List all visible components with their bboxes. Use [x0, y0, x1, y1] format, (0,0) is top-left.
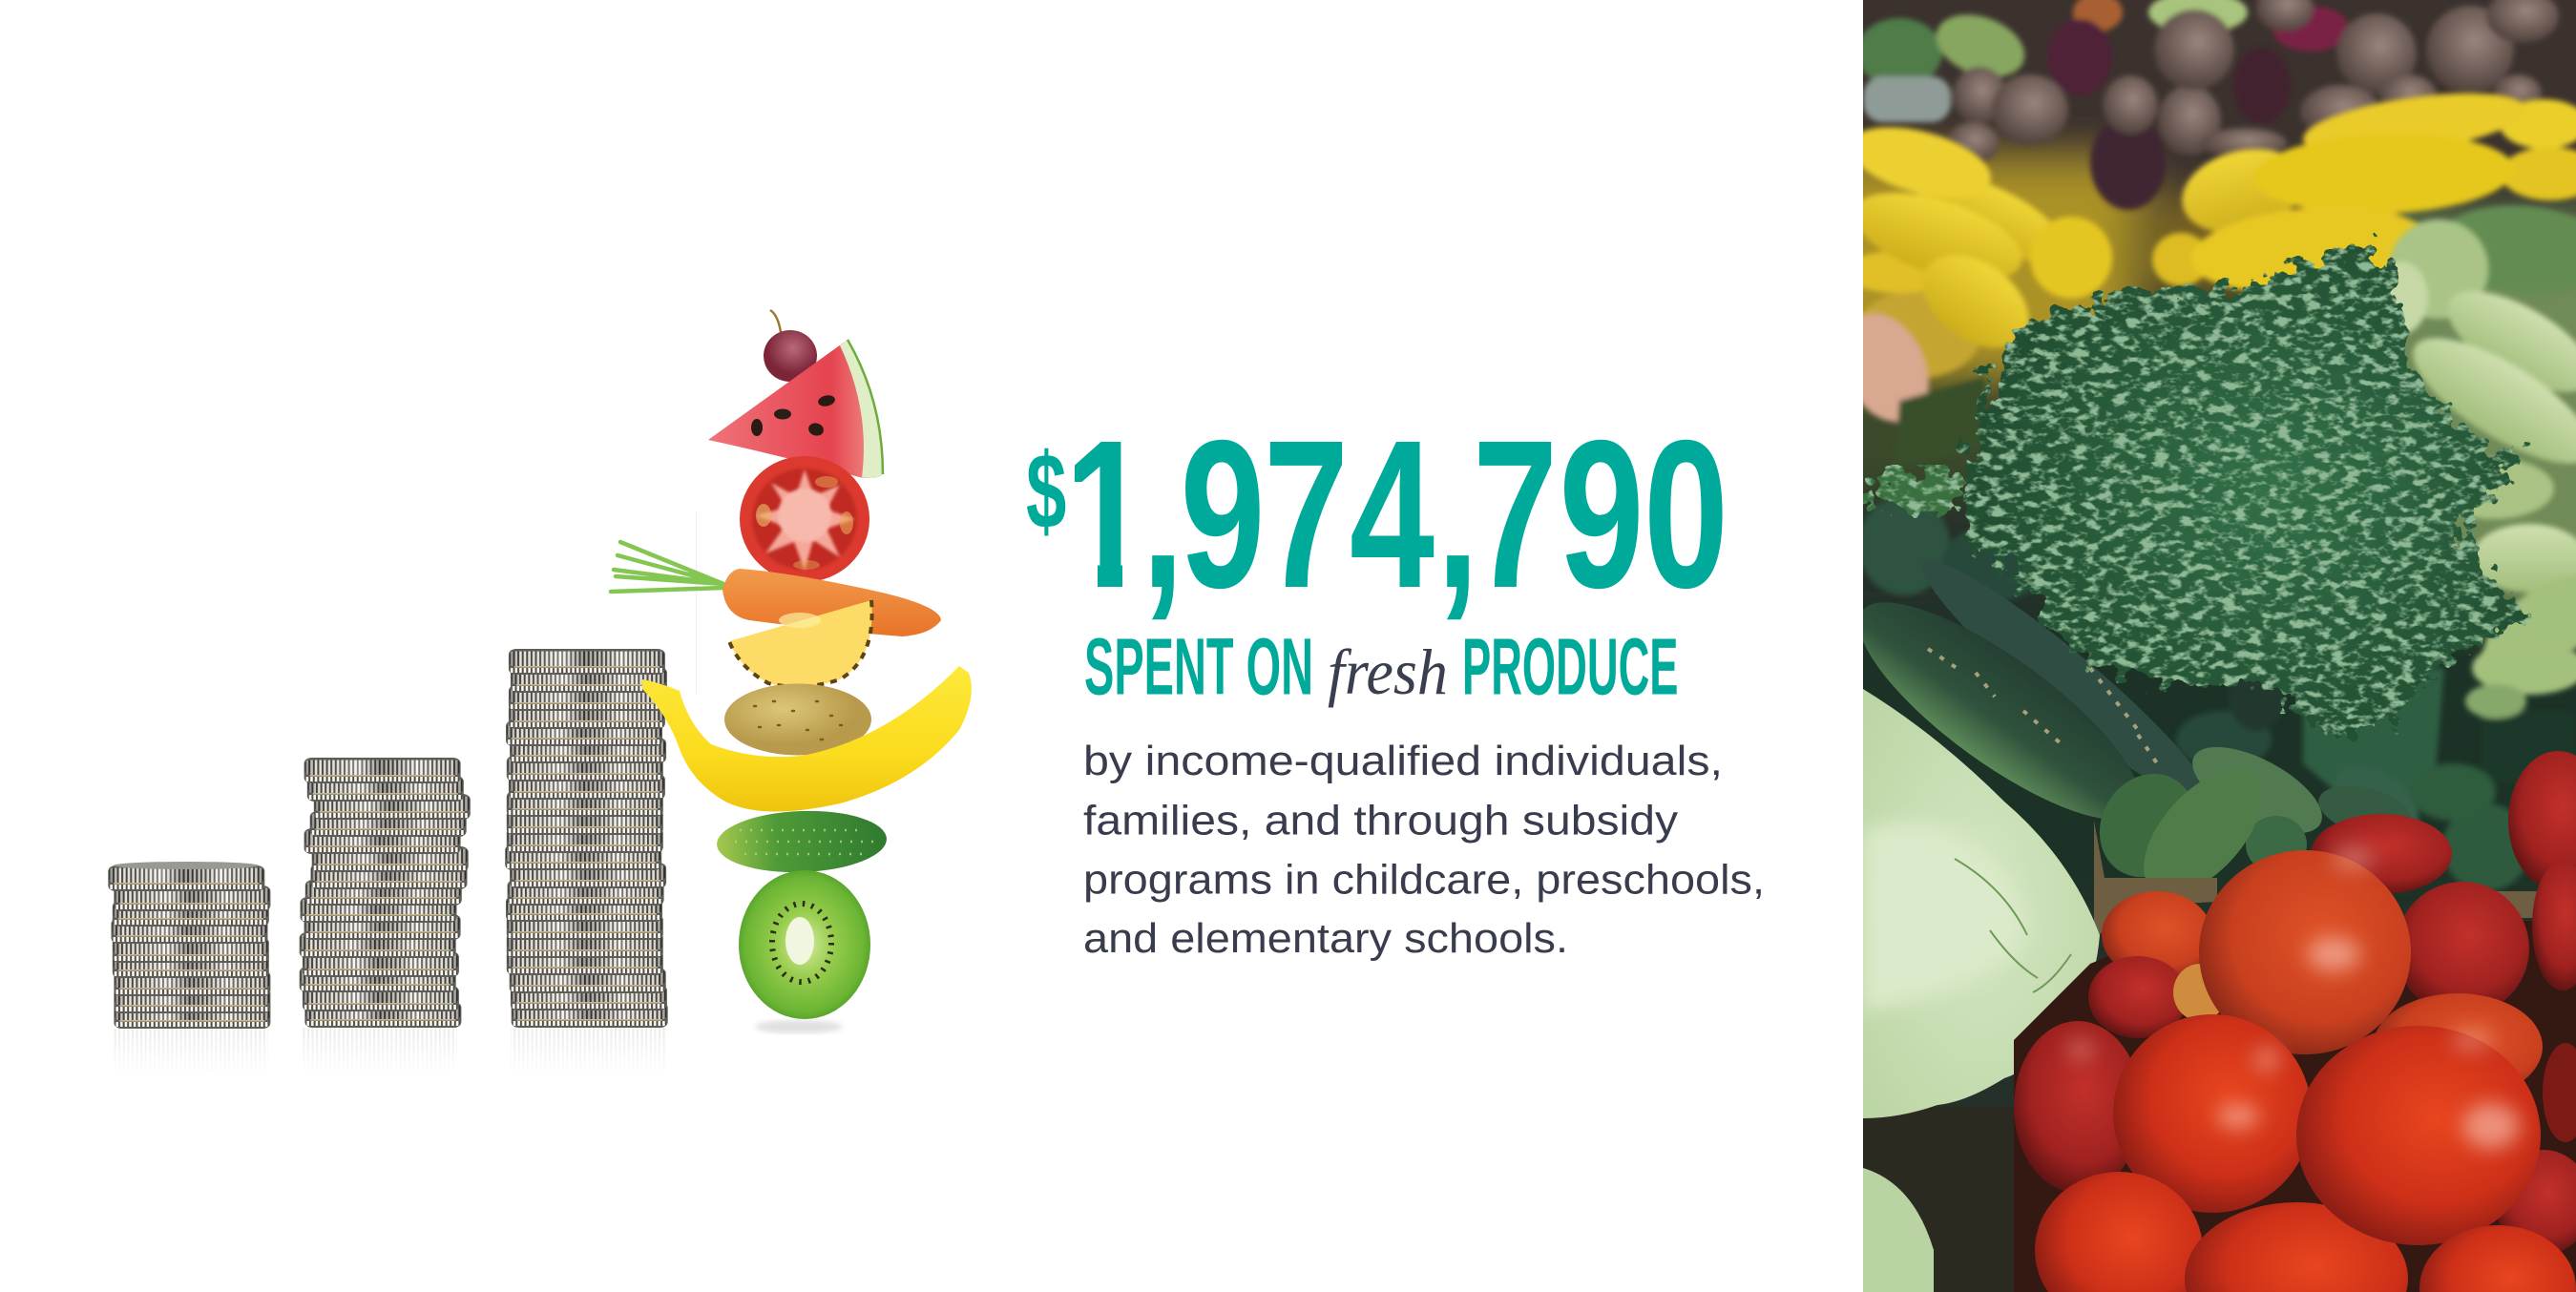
photo: pink carrot crowns: [1863, 309, 1987, 462]
icon: potato: [724, 683, 871, 756]
panel: produce photo: [1813, 0, 2576, 1292]
photo: tomatoes: [2014, 751, 2576, 1292]
icon: watermelon slice: [708, 340, 883, 478]
dollar sign: $: [1026, 431, 1066, 552]
coin stack: tall: [505, 649, 671, 1074]
headline: amount: [1027, 439, 1723, 620]
photo: left greens: [1861, 469, 1966, 514]
faint guide line: [696, 512, 697, 694]
text: fresh script: fresh: [1328, 636, 1448, 708]
photo: blurred background tones: [1813, 0, 2576, 916]
photo: dark base and box: [1863, 1107, 2014, 1292]
body text: by income-qualified individuals,: [1083, 738, 1723, 784]
coin stack chart: [108, 649, 671, 1074]
icon: grape: [764, 310, 817, 382]
photo: yellow squash: [1842, 82, 2576, 378]
icon: banana: [642, 666, 972, 812]
remaining digits: ,974,790: [1141, 396, 1728, 632]
coin stack: small: [108, 862, 272, 1074]
coin stack: medium: [300, 758, 471, 1074]
photo: cardboard box: [2094, 821, 2541, 940]
body text: and elementary schools.: [1083, 915, 1568, 962]
body text: [1083, 738, 1765, 962]
body text: programs in childcare, preschools,: [1083, 857, 1765, 903]
photo: back row beets: [1856, 0, 2559, 210]
photo: tomato highlights: [2067, 845, 2520, 1149]
icon: sliced tomato: [740, 456, 869, 582]
icon: pineapple wedge: [729, 600, 872, 687]
text: produce: PRODUCE: [1462, 622, 1678, 712]
photo: dark cucumbers and pickles: [1863, 500, 2576, 891]
photo: carrot greens: [1964, 239, 2529, 735]
icon: cucumber: [716, 808, 888, 875]
body text: families, and through subsidy: [1083, 798, 1678, 844]
photo: cabbages: [1863, 689, 2100, 1292]
text: spent on: SPENT ON: [1084, 622, 1313, 712]
icon: carrot: [611, 542, 941, 636]
kiwi shadow: [755, 1020, 843, 1033]
photo: zucchini: [2380, 202, 2576, 656]
subheading: [1084, 622, 1678, 712]
digit one: 1: [1064, 396, 1149, 632]
icon: kiwi slice: [739, 870, 870, 1019]
fruit and vegetable tower: [611, 310, 972, 1033]
